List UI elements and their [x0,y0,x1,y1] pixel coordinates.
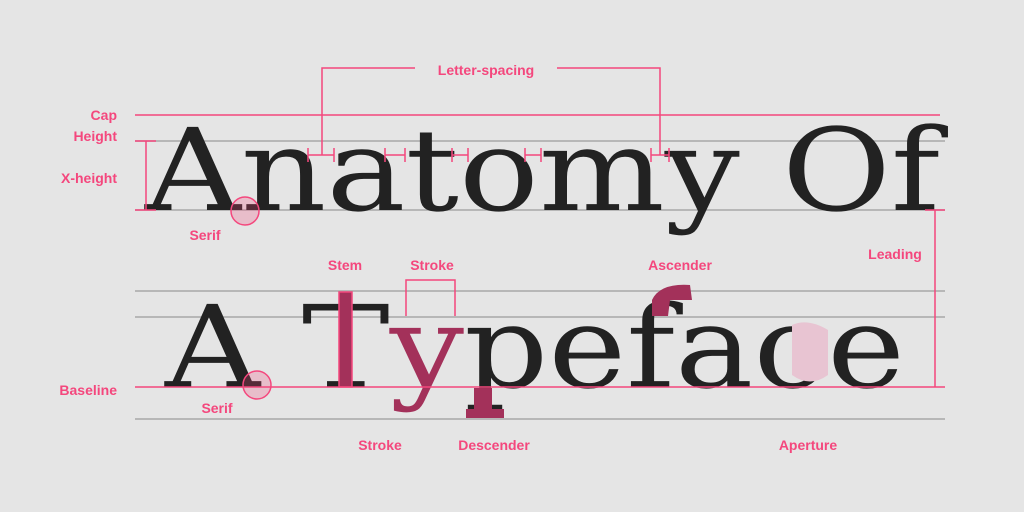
labels: Leading [868,246,922,262]
descender highlight [466,388,504,418]
labels: Height [73,128,117,144]
ascender highlight [652,285,692,316]
labels: Stroke [410,257,454,273]
labels: Baseline [59,382,117,398]
title line 2: A T ypeface [164,281,905,414]
stem highlight [339,292,352,387]
baseline & cap line [135,68,945,387]
labels: Descender [458,437,530,453]
labels: Stem [328,257,362,273]
labels [59,62,922,453]
labels: Letter-spacing [438,62,534,78]
aperture highlight [792,322,828,382]
labels: X-height [61,170,117,186]
labels: Cap [91,107,117,123]
labels: Aperture [779,437,837,453]
labels: Serif [189,227,221,243]
labels: Stroke [358,437,402,453]
title line 1: Anatomy Of [144,104,949,237]
labels: Serif [201,400,233,416]
labels: Ascender [648,257,712,273]
serif circles [231,197,259,225]
